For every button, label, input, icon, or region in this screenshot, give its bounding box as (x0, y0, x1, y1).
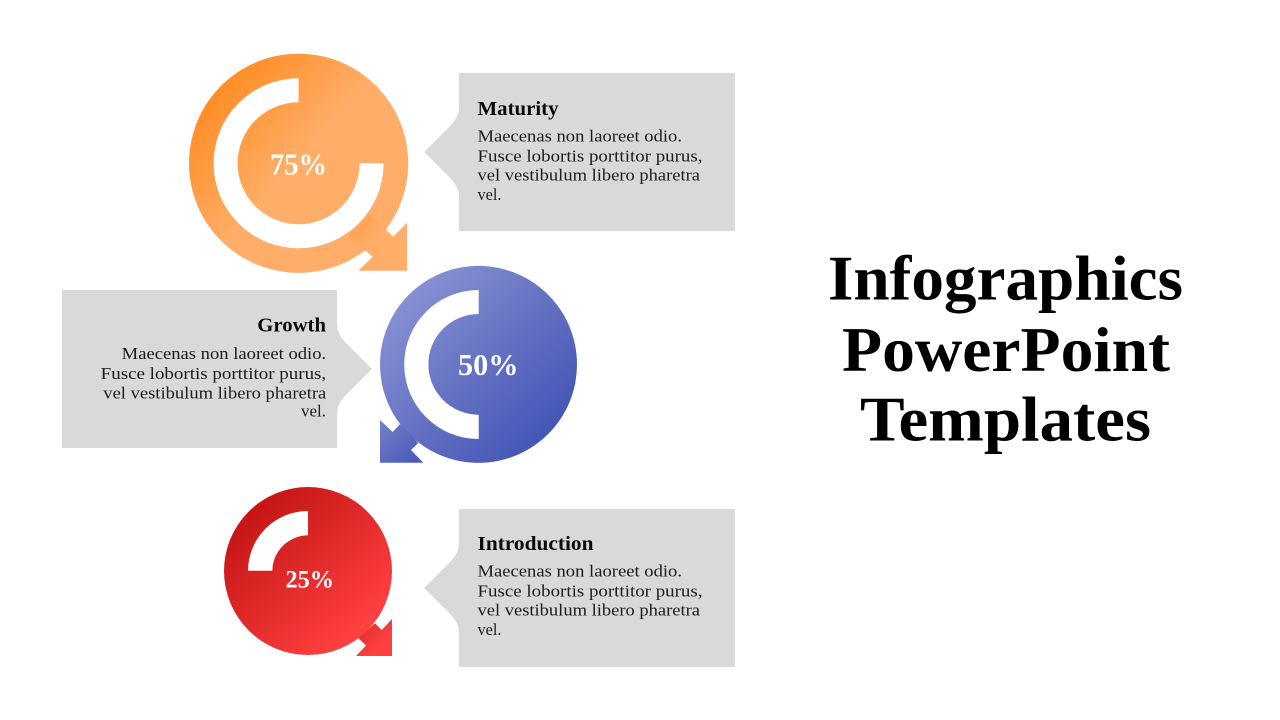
text: introduction body: Fusce lobortis porttitor purus, (478, 582, 702, 601)
text: growth body (101, 344, 327, 421)
text: maturity body: vel. (478, 185, 502, 204)
text: growth body: Maecenas non laoreet odio. (122, 344, 326, 363)
percentage: 25%: 25% (286, 567, 334, 594)
text: maturity body: vel vestibulum libero pharetra (478, 166, 701, 185)
ring: 25% progress arc (248, 511, 308, 571)
arrow: growth (380, 420, 423, 463)
title: Templates (860, 384, 1151, 454)
circle: introduction 25% (224, 487, 392, 656)
text: growth body: vel vestibulum libero pharetra (103, 383, 327, 402)
heading: maturity: Maturity (478, 98, 559, 120)
heading: growth: Growth (257, 315, 327, 337)
callout: growth (62, 290, 372, 448)
ring: 50% progress arc (404, 290, 479, 439)
text: introduction body: vel. (478, 620, 502, 639)
ring: 75% progress arc (214, 78, 384, 248)
text: maturity body: Maecenas non laoreet odio. (478, 127, 682, 146)
callout: introduction (424, 509, 735, 667)
text: maturity body: Fusce lobortis porttitor purus, (478, 147, 702, 166)
percentage: 75%: 75% (270, 146, 327, 182)
text: growth body: Fusce lobortis porttitor purus, (101, 364, 326, 383)
title (828, 244, 1183, 454)
callout: maturity (424, 73, 735, 231)
text: introduction body: vel vestibulum libero pharetra (478, 601, 701, 620)
title: PowerPoint (842, 315, 1170, 385)
circle: growth 50% (380, 266, 577, 463)
heading: introduction: Introduction (478, 533, 594, 555)
text: introduction body (478, 562, 702, 639)
arrow: introduction (356, 619, 392, 656)
text: maturity body (478, 127, 702, 204)
circle: maturity 75% (189, 54, 408, 273)
percentage: 50%: 50% (458, 347, 518, 382)
text: introduction body: Maecenas non laoreet odio. (478, 562, 682, 581)
text: growth body: vel. (301, 402, 326, 421)
title: Infographics (828, 244, 1183, 314)
arrow: maturity (348, 214, 407, 271)
